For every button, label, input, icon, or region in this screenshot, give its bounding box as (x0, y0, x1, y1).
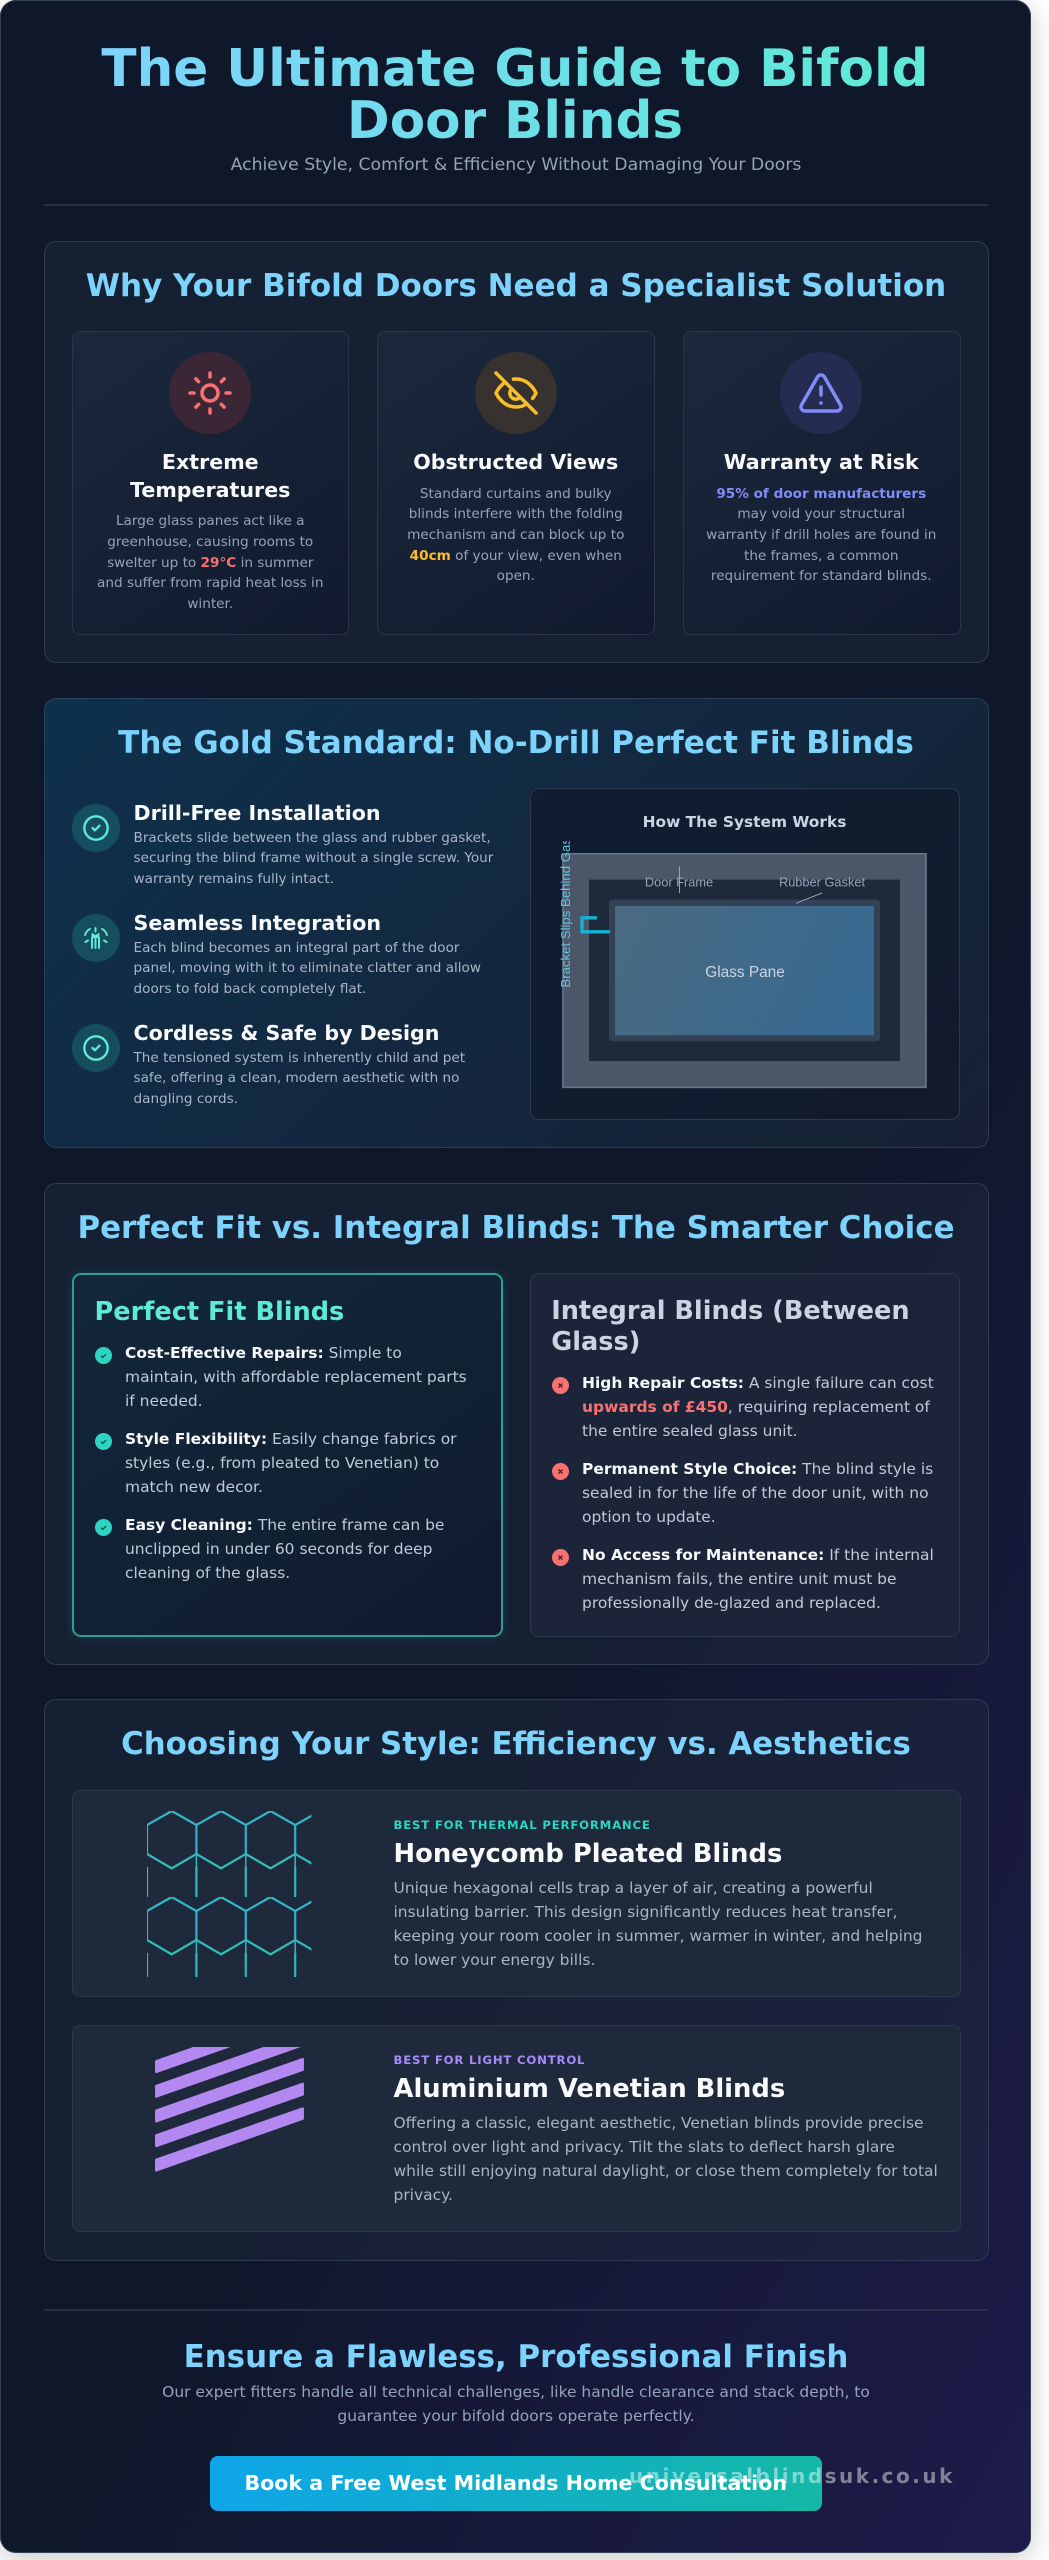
title: The Ultimate Guide to Bifold (101, 39, 929, 99)
footer text: guarantee your bifold doors operate perfectly. (337, 2407, 695, 2425)
drawback: repair costs: High Repair Costs: A single failure can cost (582, 1374, 934, 1392)
feature text (133, 1050, 465, 1107)
card text: 95% of door manufacturers (716, 486, 926, 502)
drawback: repair costs (552, 1374, 934, 1440)
drawback: maintenance: professionally de-glazed and replaced. (582, 1594, 881, 1612)
card text: and suffer from rapid heat loss in (97, 575, 323, 591)
icon: integration (72, 914, 120, 962)
card heading: Obstructed Views (413, 450, 618, 474)
card text: Offering a classic, elegant aesthetic, Venetian blinds provide precise (394, 2114, 924, 2132)
icon: warning triangle (780, 352, 862, 434)
card text: control over light and privacy. Tilt the slats to deflect harsh glare (394, 2138, 895, 2156)
diagram: door frame, gasket, glass pane and bracket (558, 841, 927, 1088)
benefit: repairs (95, 1344, 467, 1410)
feature text (134, 830, 494, 887)
panel: perfect fit blinds (72, 1273, 503, 1637)
feature text: dangling cords. (134, 1091, 238, 1107)
footer heading: Ensure a Flawless, Professional Finish (184, 2339, 848, 2375)
benefit: style: match new decor. (125, 1478, 263, 1496)
feature heading: Drill-Free Installation (134, 801, 381, 825)
feature heading: Cordless & Safe by Design (134, 1021, 439, 1045)
feature: drill-free installation (72, 801, 494, 887)
title: Door Blinds (347, 91, 683, 151)
card heading (130, 450, 290, 502)
card text (394, 2114, 938, 2204)
card text: to lower your energy bills. (394, 1951, 595, 1969)
feature text: Each blind becomes an integral part of the door (134, 940, 459, 956)
card text: swelter up to 29°C in summer (107, 555, 313, 571)
drawback: repair costs: the entire sealed glass unit. (582, 1422, 798, 1440)
watermark: universalblindsuk.co.uk (629, 2464, 955, 2488)
card: venetian blinds (72, 2025, 960, 2232)
panel heading: Perfect Fit Blinds (94, 1296, 344, 1326)
feature: cordless and safe (72, 1021, 465, 1107)
panel: how the system works (530, 788, 960, 1120)
feature text: safe, offering a clean, modern aesthetic with no (134, 1070, 459, 1086)
panel: integral blinds (530, 1273, 960, 1637)
icon: eye off (474, 352, 556, 434)
best-for label: BEST FOR LIGHT CONTROL (394, 2053, 585, 2067)
benefit: style: styles (e.g., from pleated to Venetian) to (125, 1454, 439, 1472)
drawback: maintenance: No Access for Maintenance: If the internal (582, 1546, 934, 1564)
benefit: repairs: Cost-Effective Repairs: Simple to (125, 1344, 402, 1362)
card text: warranty if drill holes are found in (706, 527, 936, 543)
card text: Large glass panes act like a (116, 513, 305, 529)
feature text: The tensioned system is inherently child and pet (134, 1050, 465, 1066)
card text (706, 486, 936, 584)
card: obstructed views (377, 331, 654, 635)
footer text (162, 2383, 870, 2425)
card heading: Extreme (162, 450, 259, 474)
diagram: door frame, gasket, glass pane and bracket: Glass Pane (705, 963, 785, 980)
card text: privacy. (394, 2186, 453, 2204)
diagram: door frame, gasket, glass pane and bracket: Rubber Gasket (779, 874, 865, 889)
card text: mechanism and can block up to (407, 527, 624, 543)
card text: while still enjoying natural daylight, or close them completely for total (394, 2162, 938, 2180)
feature heading: Seamless Integration (134, 911, 381, 935)
card: honeycomb blinds (72, 1790, 960, 1997)
card text: keeping your room cooler in summer, warmer in winter, and helping (394, 1927, 922, 1945)
drawback: maintenance: mechanism fails, the entire unit must be (582, 1570, 897, 1588)
feature text: securing the blind frame without a single screw. Your (134, 850, 493, 866)
panel: choosing your style (44, 1699, 988, 2261)
panel heading (551, 1296, 910, 1356)
benefit: style: Style Flexibility: Easily change fabrics or (125, 1430, 457, 1448)
drawback: permanent style: Permanent Style Choice: The blind style is (582, 1460, 933, 1478)
card text (407, 486, 624, 584)
panel: gold standard (44, 698, 988, 1148)
card text: open. (497, 568, 535, 584)
card text: insulating barrier. This design significantly reduces heat transfer, (394, 1903, 897, 1921)
diagram heading: How The System Works (643, 813, 846, 831)
panel: perfect fit vs integral (44, 1183, 988, 1665)
card text: may void your structural (737, 506, 905, 522)
drawback: permanent style (552, 1460, 933, 1526)
benefit: cleaning: Easy Cleaning: The entire frame can be (125, 1516, 444, 1534)
benefit: cleaning: cleaning of the glass. (125, 1564, 290, 1582)
subtitle: Achieve Style, Comfort & Efficiency Without Damaging Your Doors (231, 155, 801, 175)
feature text: panel, moving with it to eliminate clatter and allow (134, 960, 481, 976)
card text: requirement for standard blinds. (711, 568, 932, 584)
heading: why specialist solution: Why Your Bifold Doors Need a Specialist Solution (86, 268, 946, 304)
icon: check circle (72, 804, 120, 852)
heading: gold standard: The Gold Standard: No-Drill Perfect Fit Blinds (118, 725, 914, 761)
card text: blinds interfere with the folding (409, 506, 623, 522)
card: extreme temperatures (72, 331, 349, 635)
card text (394, 1879, 922, 1969)
card text: winter. (187, 596, 233, 612)
feature text (134, 940, 481, 997)
card heading: Aluminium Venetian Blinds (394, 2074, 785, 2104)
drawback: permanent style: option to update. (582, 1508, 716, 1526)
panel heading: Integral Blinds (Between (551, 1296, 910, 1326)
card text: Unique hexagonal cells trap a layer of air, creating a powerful (394, 1879, 873, 1897)
call-to-action button (210, 2456, 822, 2511)
heading: choosing style: Choosing Your Style: Efficiency vs. Aesthetics (121, 1726, 911, 1762)
panel: why specialist solution (44, 241, 988, 663)
drawback: permanent style: sealed in for the life of the door unit, with no (582, 1484, 929, 1502)
feature text: warranty remains fully intact. (134, 871, 334, 887)
call-to-action button: Book a Free West Midlands Home Consultation (244, 2471, 787, 2495)
icon: honeycomb pattern (147, 1811, 312, 1977)
card heading: Temperatures (130, 478, 290, 502)
feature text: Brackets slide between the glass and rubber gasket, (134, 830, 491, 846)
drawback: repair costs: upwards of £450, requiring replacement of (582, 1398, 930, 1416)
card heading: Honeycomb Pleated Blinds (394, 1839, 782, 1869)
best-for label: BEST FOR THERMAL PERFORMANCE (394, 1818, 651, 1832)
feature text: doors to fold back completely flat. (134, 981, 366, 997)
icon: sun (169, 352, 251, 434)
panel heading: Glass) (551, 1326, 640, 1356)
card text: greenhouse, causing rooms to (107, 534, 313, 550)
drawback: maintenance (552, 1546, 934, 1612)
card: warranty at risk (682, 331, 960, 635)
feature: seamless integration (72, 911, 481, 997)
card text: Standard curtains and bulky (420, 486, 612, 502)
icon: venetian slats (155, 2047, 304, 2172)
card heading: Warranty at Risk (724, 450, 919, 474)
benefit: repairs: if needed. (125, 1392, 203, 1410)
icon: check circle (72, 1024, 120, 1072)
card text: the frames, a common (744, 548, 899, 564)
benefit: repairs: maintain, with affordable replacement parts (125, 1368, 467, 1386)
benefit: style (95, 1430, 457, 1496)
footer text: Our expert fitters handle all technical challenges, like handle clearance and stack depth, to (162, 2383, 870, 2401)
benefit: cleaning: unclipped in under 60 seconds for deep (125, 1540, 432, 1558)
title (100, 43, 930, 147)
benefit: cleaning (95, 1516, 444, 1582)
diagram: door frame, gasket, glass pane and bracket: Door Frame (645, 874, 713, 889)
heading: comparison: Perfect Fit vs. Integral Blinds: The Smarter Choice (77, 1210, 955, 1246)
card text (97, 513, 323, 612)
card text: 40cm of your view, even when (410, 548, 622, 564)
